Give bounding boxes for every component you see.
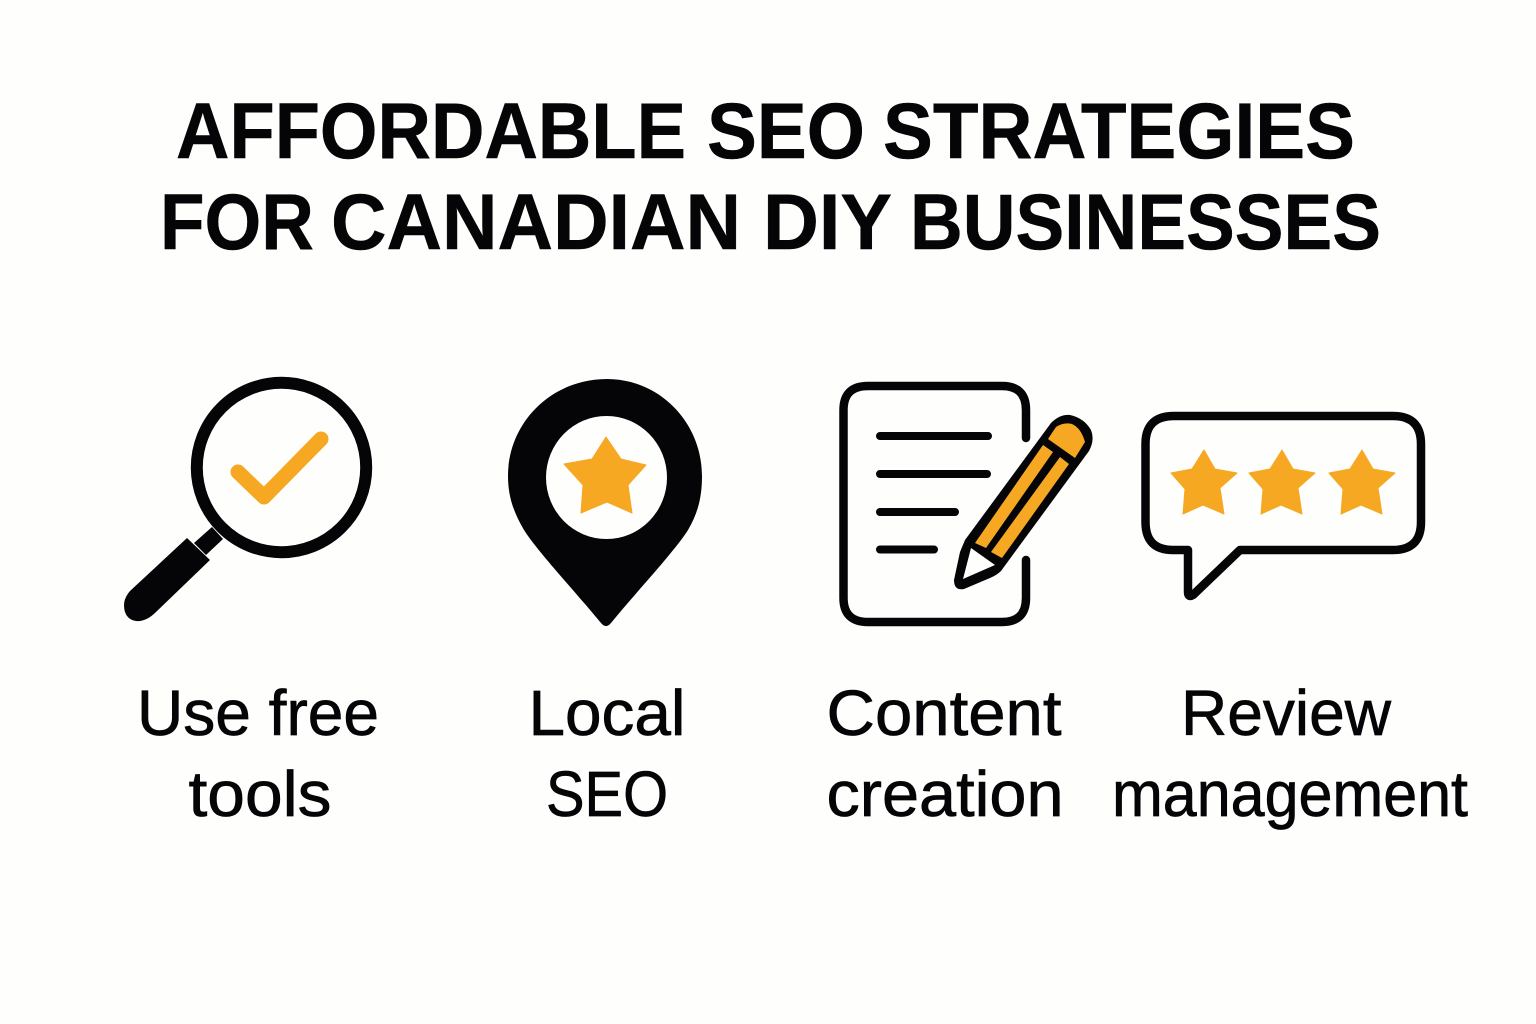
label: local seo: SEO xyxy=(546,758,668,830)
title xyxy=(160,86,1381,266)
label: content creation xyxy=(826,677,1064,830)
title: STRATEGIES xyxy=(883,86,1355,175)
title: AFFORDABLE xyxy=(176,86,686,175)
label: use free tools xyxy=(137,677,379,830)
title: BUSINESSES xyxy=(910,177,1381,266)
label: content creation: Content xyxy=(826,677,1062,749)
label: review management: Review xyxy=(1181,677,1392,749)
label: use free tools: Use free xyxy=(137,677,379,749)
label: review management xyxy=(1112,677,1468,830)
icon: magnifying glass with check xyxy=(124,383,366,621)
title: FOR xyxy=(160,177,314,266)
label: review management: management xyxy=(1112,758,1468,830)
pencil xyxy=(954,415,1093,589)
icon: document with pencil xyxy=(844,386,1093,622)
label: local seo: Local xyxy=(528,677,686,749)
title: DIY xyxy=(763,177,892,266)
icon: speech bubble with stars xyxy=(1146,416,1421,596)
label: content creation: creation xyxy=(826,758,1064,830)
label: use free tools: tools xyxy=(188,758,332,830)
label: local seo xyxy=(528,677,686,830)
title: SEO xyxy=(707,86,865,175)
icon: map pin with star xyxy=(508,379,702,626)
title: CANADIAN xyxy=(331,177,741,266)
